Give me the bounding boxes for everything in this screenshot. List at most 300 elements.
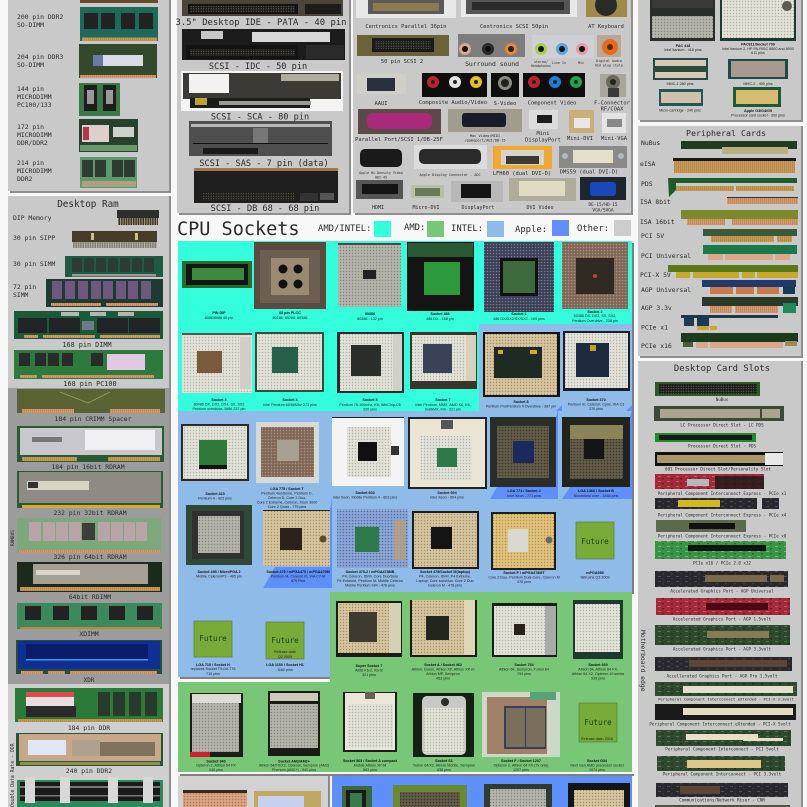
socket: Socket 370: Socket 370 bbox=[586, 398, 606, 402]
socket: Socket A: Athlon MP, Sempron bbox=[426, 672, 460, 676]
socket: Socket 603: Intel Xeon, Mobile Pentium 4 - 603 pins bbox=[333, 496, 397, 500]
connector: SCSI DB 68 bbox=[194, 168, 338, 214]
socket: Socket 7: 6x86MX, MII - 321 pin bbox=[425, 408, 461, 412]
socket: MMC-1 bbox=[653, 58, 708, 86]
connector: audio jacks: Line In bbox=[552, 61, 566, 65]
socket: PAC 611: PAC611/Socket 700 bbox=[741, 42, 775, 46]
socket: grey pin socket bbox=[484, 784, 552, 807]
connector: IDE PATA: 3.5" Desktop IDE - PATA - 40 pin bbox=[176, 18, 346, 28]
slot: 601 PDS: 601 Processor Direct Slot/Personality Slot bbox=[665, 466, 771, 472]
ram: 184 pin 16bit RDRAM: 184 pin 16bit RDRAM bbox=[51, 463, 125, 471]
socket: Socket A: 453 pins bbox=[436, 676, 450, 680]
future socket: LGA 715 bbox=[191, 621, 235, 676]
slot: AGP 1.5 bbox=[656, 598, 790, 622]
socket: 80386: 80386 bbox=[365, 312, 375, 316]
socket: 68 pin PLCC bbox=[254, 242, 326, 320]
card: PDS: PDS bbox=[641, 180, 653, 188]
connector: DVI Video: DVI Video bbox=[526, 205, 554, 211]
legend: AMD/INTEL: bbox=[318, 224, 371, 234]
socket: Socket 604: Socket 604 bbox=[437, 491, 458, 495]
ram: DIP memory: DIP Memory bbox=[13, 214, 52, 222]
ram: 184 pin DDR bbox=[15, 688, 163, 732]
socket: MMC-2 bbox=[728, 59, 788, 86]
socket: Socket F: 1207 pins bbox=[513, 768, 529, 772]
connector: Digital Audio RCA bbox=[595, 35, 623, 68]
future socket: LGA 1150 bbox=[266, 622, 304, 672]
future socket: mPGA989 bbox=[576, 522, 614, 580]
connector: Component Video: Component Video bbox=[528, 100, 576, 106]
slot: CNR: Communications/Network Riser - CNR bbox=[679, 798, 765, 802]
connector: Mac Video/MIDI DA-15 bbox=[448, 109, 522, 142]
socket: Socket 479 M: Laptop: Core solo/duo, Core 2 Duo bbox=[416, 579, 474, 583]
card: AGP 3.3v: AGP 3.3v bbox=[641, 304, 672, 312]
panel: AMD sockets bbox=[178, 592, 634, 776]
connector: SCSI IDC: SCSI - IDC - 50 pin bbox=[209, 62, 307, 72]
ram: DDR3 with heat spreader bbox=[17, 777, 163, 807]
connector: SCSI SAS bbox=[189, 121, 332, 169]
card: PCI Universal: PCI Universal bbox=[641, 252, 691, 260]
socket: Socket 939: 939 pins bbox=[591, 676, 605, 680]
connector: F-Connector: F-Connector bbox=[594, 100, 631, 106]
ram: 200 pin DDR2 SO-DIMM: 200 pin DDR2 bbox=[17, 13, 63, 21]
socket: Apple G3/G4/G5: Processor card socket - 300 pins bbox=[731, 114, 785, 118]
socket: MMC-2: MMC-2 - 400 pins bbox=[743, 82, 773, 86]
connector: Component Video bbox=[523, 73, 585, 106]
connector: Composite Audio/Video bbox=[419, 73, 487, 106]
socket: Socket S1 bbox=[413, 693, 475, 772]
card: ISA 16bit: ISA 16bit bbox=[640, 218, 675, 226]
socket: Socket 495: Mobile Celeron/P3 - 495 pin bbox=[196, 574, 242, 578]
legend: AMD: bbox=[404, 223, 425, 233]
socket: Socket 940: Socket 940 bbox=[206, 760, 226, 764]
socket: Socket 2: 80486 DX, DX2, SX, SX2, bbox=[574, 314, 616, 318]
ram: 184 pin CRIMM Spacer: 184 pin CRIMM Spacer bbox=[55, 415, 132, 423]
socket: Socket 1: 486 DX/DX2/SX/SX2 - 169 pins bbox=[493, 317, 545, 321]
ram: 30 pin SIPP: 30 pin SIPP bbox=[13, 234, 55, 242]
card: PCI-X 5V: PCI-X 5V bbox=[640, 271, 671, 279]
socket: Socket AM2 bbox=[259, 691, 329, 772]
card: AGP Universal bbox=[641, 280, 796, 294]
slot: PCIe x8: Peripheral Component Interconnect Express - PCIe x8 bbox=[658, 534, 787, 538]
ram: 326 pin 64bit RDRAM bbox=[17, 518, 161, 561]
connector: SCSI SAS: SCSI - SAS - 7 pin (data) bbox=[199, 159, 329, 169]
card: ISA 8bit bbox=[640, 197, 798, 206]
heading: Desktop Ram: Desktop Ram bbox=[57, 199, 119, 210]
ram: 204 pin DDR3 SO-DIMM bbox=[17, 44, 157, 78]
socket: Socket 5: Socket 5 bbox=[362, 398, 378, 402]
socket: Micro-cartridge: Micro-cartridge - 240 pins bbox=[659, 108, 701, 112]
connector: VGA: VGA/SVGA bbox=[592, 208, 614, 214]
future socket: mPGA989: Future bbox=[581, 537, 609, 546]
socket: PAC 611: 611 pins bbox=[751, 51, 765, 55]
ram: 72 pin SIMM: 72 pin bbox=[13, 283, 36, 291]
ram: 72 pin SIMM bbox=[13, 279, 163, 307]
connector: HDMI bbox=[356, 180, 403, 211]
slot: partial slot at bottom bbox=[655, 805, 790, 807]
connector: IDE PATA bbox=[176, 0, 346, 28]
socket: Socket 563: Socket 563 / Socket A compact bbox=[343, 759, 398, 763]
ram: 30 pin SIPP bbox=[13, 231, 157, 248]
socket: Socket 370: Pentium III, Celeron, Cyrix, VIA C3 bbox=[568, 402, 624, 406]
future socket: mPGA989: 989 pins Q3 2009 bbox=[580, 576, 610, 580]
socket: Socket 370 bbox=[563, 331, 630, 411]
socket: Socket 495 bbox=[186, 505, 252, 578]
connector: Mini-DVI bbox=[567, 110, 594, 142]
connector: audio jacks: Headphones bbox=[531, 64, 551, 68]
ram: 144 pin MICRODIMM bbox=[17, 83, 120, 116]
card: PDS bbox=[641, 178, 797, 197]
future socket: LGA 715: Future bbox=[199, 634, 227, 643]
future socket: mPGA989: mPGA989 bbox=[586, 571, 604, 575]
socket: Socket 563: Mobile Athlon XP-M bbox=[354, 764, 386, 768]
future socket: Socket G34 bbox=[570, 703, 624, 772]
socket: LGA 775: Pentium 4/extreme, Pentium D, bbox=[261, 492, 313, 496]
socket: Apple G3/G4/G5 bbox=[731, 87, 785, 118]
socket: LGA 775: LGA 775 / Socket T bbox=[270, 487, 304, 491]
ram: XDR: XDR bbox=[84, 677, 95, 684]
socket: Micro-cartridge bbox=[659, 89, 703, 112]
ram: 214 pin MICRODIMM bbox=[17, 157, 137, 188]
slot: PCIe x1: Peripheral Component Interconnect Express - PCIe x1 bbox=[658, 491, 787, 496]
socket: LGA 1366: LGA 1366 / Socket B bbox=[578, 489, 614, 493]
ram: 172 pin MICRODIMM: MICRODIMM bbox=[17, 131, 52, 139]
socket: Socket 603: Socket 603 bbox=[355, 491, 375, 495]
socket: Socket 3: Socket 3 bbox=[211, 398, 227, 402]
connector: Apple Hi-Density Video bbox=[357, 147, 405, 180]
socket: Socket 8 bbox=[483, 332, 560, 408]
future socket: LGA 1150: Q2 2009 bbox=[278, 655, 292, 659]
socket: Socket 2: Pentium Overdrive - 238 pin bbox=[572, 319, 618, 323]
connector: VGA bbox=[580, 177, 626, 214]
socket: Socket A: Athlon, Duron, Athlon XP, Athlon XP-m bbox=[412, 668, 474, 672]
connector: DisplayPort bbox=[451, 181, 503, 211]
connector: Digital Audio RCA: Digital Audio bbox=[596, 59, 622, 63]
socket: Socket 940 bbox=[190, 693, 243, 772]
socket: 80386: 80386 - 132 pin bbox=[357, 317, 383, 321]
ram: 144 pin MICRODIMM: 144 pin bbox=[17, 85, 44, 93]
connector: SCSI DB 68: SCSI - DB 68 - 68 pin bbox=[211, 204, 319, 214]
card: PCIe x1: PCIe x1 bbox=[641, 324, 668, 332]
future socket: Socket G34: Release date: 2010 bbox=[581, 737, 613, 741]
socket: Socket 479 bbox=[263, 498, 332, 588]
panel: desktop ram bbox=[8, 196, 171, 807]
accent: Apple corner Socket 8 bbox=[556, 405, 562, 411]
future socket: LGA 1150: LGA 1150 / Socket H1 bbox=[266, 663, 304, 667]
connector: F-Connector: RF/COAX bbox=[601, 106, 624, 112]
connector: 50 pin SCSI 2: 50 pin SCSI 2 bbox=[381, 59, 423, 65]
connector: Composite Audio/Video: Composite Audio/Video bbox=[419, 100, 487, 106]
panel: Apple sockets bbox=[332, 776, 632, 807]
slot: PCI 3.3: Peripheral Component Interconnect - PCI 3.3volt bbox=[663, 772, 782, 776]
future socket: Socket G34: Socket G34 bbox=[587, 759, 608, 763]
connector: Centronics SCSI 50pin bbox=[461, 0, 577, 30]
socket: Socket 479: Socket 479 / mPGA479 / mPGA479M bbox=[266, 570, 330, 574]
connector: SCSI IDC bbox=[182, 29, 345, 72]
heading: CPU Sockets: CPU Sockets bbox=[177, 219, 300, 240]
connector: VGA: DE-15/HD-15 bbox=[588, 202, 618, 208]
socket: Socket 478-2: P4 Extreme, Pentium M, Mobile Celeron bbox=[337, 579, 403, 583]
ram: 184 pin 16bit RDRAM bbox=[17, 426, 164, 471]
socket: Socket 754: 754 pins bbox=[517, 672, 531, 676]
ram: 232 pin 32bit RDRAM bbox=[17, 471, 163, 517]
socket: Socket 479 M: P4, Celeron, IDrM, P4 Extreme, bbox=[419, 574, 471, 578]
ram: 184 pin DDR: 184 pin DDR bbox=[68, 724, 110, 732]
ram: DIP memory bbox=[13, 210, 159, 225]
label: Double Data Rate vertical: Double Data Rate - DDR bbox=[10, 743, 16, 807]
slot: NuBus bbox=[655, 382, 760, 402]
future socket: Socket G34: 1974 pins bbox=[589, 768, 605, 772]
socket: LGA 775: Core 2 Quad - 775 pins bbox=[268, 505, 306, 509]
connector: F-Connector bbox=[594, 74, 631, 112]
socket: Socket S1: Socket S1 bbox=[435, 759, 453, 763]
socket: LGA 775: Core 2 Extreme, Celeron, Xeon 3000 bbox=[257, 500, 317, 504]
slot: PCI 3.3 bbox=[657, 756, 785, 776]
connector: Centronics Parallel 36pin: Centronics Parallel 36pin bbox=[365, 24, 447, 30]
connector: Mini DisplayPort: DisplayPort bbox=[525, 138, 561, 144]
ram: 30 pin SIMM: 30 pin SIMM bbox=[13, 260, 55, 268]
connector: Apple Hi-Density Video: HDI-45 bbox=[375, 176, 387, 180]
slot: AGP Universal: Accelerated Graphics Port - AGP Universal bbox=[670, 588, 774, 594]
socket: PAC 418: Intel Itanium - 418 pins bbox=[664, 48, 702, 52]
panel: hard drive connectors bbox=[176, 0, 351, 215]
ram: XDIMM bbox=[17, 603, 162, 638]
slot: PCI-X 5: Peripheral Component Interconnect eXtended - PCI-X 5volt bbox=[649, 722, 791, 726]
socket: Socket 8: Socket 8 bbox=[513, 400, 529, 404]
socket: PIN DIP bbox=[182, 261, 252, 320]
ram: 214 pin MICRODIMM: MICRODIMM bbox=[17, 167, 52, 175]
connector: AAUI bbox=[357, 74, 406, 107]
card: PCI Universal bbox=[641, 245, 797, 260]
socket: Apple G3/G4/G5: Apple G3/G4/G5 bbox=[744, 109, 772, 113]
socket: Socket 5 bbox=[337, 332, 404, 412]
connector: Mini-VGA: Mini-VGA bbox=[601, 136, 628, 142]
socket: Socket F: Opteron 2, Athlon 64 FX (7x only) bbox=[494, 764, 548, 768]
connector: Surround sound: Surround sound bbox=[465, 60, 519, 68]
panel: desktop card slots bbox=[638, 361, 803, 807]
section: DDR band bbox=[8, 684, 169, 807]
card: AGP Universal: AGP Universal bbox=[641, 286, 691, 294]
socket: Socket 5: 320 pins bbox=[363, 408, 377, 412]
connector: Micro-DVI bbox=[411, 185, 444, 211]
socket: LGA 775: Celeron D, Core 2 Duo, bbox=[268, 496, 306, 500]
socket: Socket 7: Socket 7 bbox=[435, 398, 451, 402]
ram: 168 pin PC100: 168 pin PC100 bbox=[63, 380, 117, 388]
slot: PDS bbox=[655, 433, 757, 448]
connector: Centronics Parallel 36pin bbox=[356, 0, 456, 30]
socket: Socket A bbox=[410, 600, 477, 680]
socket: LGA 775 bbox=[256, 422, 319, 509]
socket: gold frame socket bbox=[254, 791, 321, 807]
card: eISA bbox=[640, 158, 796, 173]
socket: Socket 939: Athlon 64, Athlon 64 FX, bbox=[578, 668, 618, 672]
card: ISA 16bit bbox=[640, 210, 798, 226]
socket: PAC 611: Intel Itanium 2, HP PA-RISC 8800 and 8900 bbox=[722, 47, 794, 51]
socket: Socket 479 M: Celeron M - 478 pins bbox=[428, 584, 462, 588]
slot: NuBus: NuBus bbox=[716, 397, 729, 402]
ram: 144 pin MICRODIMM: MICRODIMM bbox=[17, 93, 52, 101]
socket: Super Socket 7: AMD K6-2, K6-III bbox=[355, 668, 383, 672]
legend: INTEL: bbox=[451, 224, 483, 234]
ram: 64bit RDIMM bbox=[17, 562, 162, 601]
socket: Socket 478-2: P4, Celeron, IDrM, Core Duo/Solo bbox=[342, 574, 398, 578]
connector: DVI Video bbox=[509, 178, 576, 211]
slot: PCIe x4 bbox=[655, 498, 787, 518]
slot: AGP Pro: Accellerated Graphics Port - AGP Pro 1.5volt bbox=[667, 674, 778, 678]
connector: AAUI: AAUI bbox=[375, 101, 387, 107]
connector: Digital Audio RCA: RCA plug style bbox=[595, 64, 623, 68]
socket: Socket 4: Socket 4 bbox=[282, 398, 299, 402]
heading: Desktop Card Slots: Desktop Card Slots bbox=[674, 364, 770, 374]
slot: 601 PDS bbox=[655, 452, 783, 472]
panel: peripheral cards bbox=[638, 126, 803, 358]
slot: PCI 5 bbox=[656, 730, 791, 752]
slot: PDS: Processor Direct Slot - PDS bbox=[688, 444, 757, 448]
socket: Socket AM2: Athlon 64/FX/X2, Opteron, Sempron (AM2) bbox=[259, 764, 329, 768]
connector: DMS59 bbox=[559, 146, 627, 176]
socket: Socket 7: Intel Pentium, MMX, AMD K6, K6, bbox=[415, 403, 471, 407]
socket: Socket 2 bbox=[562, 242, 628, 323]
future socket: LGA 1150: Future bbox=[271, 636, 299, 645]
slot: AGP 3.3 bbox=[655, 625, 790, 652]
ram: 214 pin MICRODIMM: DDR2 bbox=[17, 175, 33, 183]
card: NuBus: NuBus bbox=[641, 139, 660, 147]
socket: beige pin socket bbox=[568, 783, 630, 807]
slot: PCIe x8 bbox=[656, 520, 787, 538]
connector: DMS59: DMS59 (dual DVI-D) bbox=[560, 170, 618, 176]
card: eISA: eISA bbox=[640, 160, 656, 168]
socket: Socket 4 bbox=[255, 332, 324, 407]
slot: PCIe x4: Peripheral Component Interconnect Express - PCIe x4 bbox=[658, 512, 787, 518]
connector: 50 pin SCSI 2 bbox=[357, 35, 449, 65]
ram: 200 pin DDR2 SO-DIMM bbox=[17, 7, 158, 41]
card: PCI-X 5V bbox=[640, 265, 798, 279]
slot: AGP 3.3: Accelerated Graphics Port - AGP 3.3volt bbox=[673, 646, 772, 652]
socket: Socket 3: Pentium overdrive, 5x86 237 pin bbox=[193, 407, 245, 411]
slot: PCIe x16: PCIe x16 / PCIe 2.0 x32 bbox=[693, 560, 751, 566]
ram: 184 pin CRIMM Spacer bbox=[17, 389, 165, 423]
socket: Socket 4: Intel Pentium 60/66Mhz 273 pins bbox=[263, 403, 317, 407]
ram: 144 pin MICRODIMM: PC100/133 bbox=[17, 101, 52, 109]
slot: PCI-X 3.3 bbox=[655, 682, 797, 702]
slot: LC PDS bbox=[654, 406, 784, 428]
connector: LFH60: LFH60 (dual DVI-D) bbox=[493, 171, 551, 177]
ram: 232 pin 32bit RDRAM: 232 pin 32bit RDRAM bbox=[53, 509, 127, 517]
socket: Socket 495: Socket 495 / MicroPGA 2 bbox=[197, 570, 241, 574]
connector: Mini DisplayPort bbox=[525, 110, 561, 144]
socket: Super Socket 7: Super Socket 7 bbox=[356, 664, 382, 668]
socket: Socket 604: Intel Xeon - 604 pins bbox=[430, 496, 464, 500]
connector: Mini DisplayPort: Mini bbox=[537, 131, 549, 137]
socket: Socket 939: Socket 939 bbox=[588, 663, 608, 667]
slot: AGP Pro bbox=[655, 657, 792, 678]
ram: 172 pin MICRODIMM bbox=[17, 119, 138, 152]
connector: Mac Video/MIDI DA-15: /gameport/AUI/DB-15 bbox=[464, 138, 506, 142]
connector: SCSI SCA bbox=[181, 71, 343, 122]
socket: PIN DIP: 8086/8088 40-pin bbox=[205, 316, 233, 320]
ram: 64bit RDIMM: 64bit RDIMM bbox=[69, 593, 111, 601]
socket: Socket 3: 80486 DX, DX2, DX4, SX, SX2 bbox=[194, 402, 244, 406]
connector: S-Video: S-Video bbox=[494, 101, 516, 107]
socket: Socket 939 bbox=[572, 600, 624, 680]
socket: Socket 940: Opteron 2, Athlon 64 FX bbox=[196, 764, 236, 768]
slot: AGP Universal bbox=[655, 571, 788, 594]
socket: Socket 939: Athlon 64 X2, Opteron 10 series bbox=[572, 672, 624, 676]
socket: Socket 5: Pentium 75-100mhz, K5, WinChip-C6 bbox=[339, 403, 401, 407]
ram: 30 pin SIMM bbox=[13, 256, 163, 277]
future socket: Socket G34: Future bbox=[584, 718, 612, 727]
socket: LGA 771: Intel Xeon - 771 pins bbox=[507, 494, 541, 498]
socket: Socket 604 bbox=[408, 417, 487, 500]
connector: Apple Display Connector: Apple Display Connector - ADC bbox=[419, 173, 481, 177]
card: PCIe x16 bbox=[641, 333, 798, 350]
ram: 72 pin SIMM: SIMM bbox=[13, 291, 29, 299]
future socket: Socket G34: Next Gen AMD processor socket bbox=[570, 764, 624, 768]
socket: PAC 418: PAC 418 bbox=[676, 44, 690, 48]
slot: LC PDS: LC Processor Direct Slot - LC PDS bbox=[680, 422, 764, 428]
label: RAMBUS vertical: RAMBUS bbox=[10, 530, 16, 546]
ram: XDIMM: XDIMM bbox=[79, 630, 99, 638]
ram: 172 pin MICRODIMM: DDR/DDR2 bbox=[17, 139, 48, 147]
future socket: LGA 1150: Release date bbox=[274, 650, 296, 654]
connector: AT Keyboard: AT Keyboard bbox=[588, 24, 624, 30]
socket: Socket 479: Pentium M, Celeron M, VIA C7-M bbox=[271, 574, 325, 578]
panel: external connectors bbox=[353, 0, 633, 215]
connector: Mini-VGA bbox=[601, 113, 628, 142]
connector: AT Keyboard bbox=[586, 0, 627, 30]
socket: 486: Socket 486 bbox=[430, 312, 450, 316]
connector: Mac Video/MIDI DA-15: Mac Video/MIDI bbox=[470, 134, 500, 138]
socket: PAC 611 bbox=[720, 0, 796, 55]
future socket: LGA 1150: 1160 pins bbox=[277, 668, 293, 672]
socket: Socket S1: Turion 64/X2, Athlon Mobile, Sempron bbox=[413, 764, 475, 768]
future socket: LGA 715: replaces Socket T/LGA 775 bbox=[191, 667, 235, 671]
connector: HDMI: HDMI bbox=[372, 205, 384, 211]
socket: 486 bbox=[407, 242, 474, 321]
ram: 168 pin DIMM: 168 pin DIMM bbox=[62, 341, 112, 349]
future socket: LGA 715: 715 pins bbox=[206, 672, 220, 676]
card: PCIe x1 bbox=[641, 315, 778, 332]
socket: Socket 1 bbox=[484, 242, 554, 321]
card: PCI 5V: PCI 5V bbox=[641, 232, 664, 240]
connector: Mini-DVI: Mini-DVI bbox=[567, 136, 593, 142]
connector: Centronics SCSI 50pin: Centronics SCSI 50pin bbox=[480, 24, 548, 30]
socket: PIN DIP: PIN DIP bbox=[212, 311, 226, 315]
socket: copper pin array bbox=[183, 790, 247, 807]
socket: Socket 478-2: Socket 478-2 / mPGA478MB bbox=[346, 570, 395, 574]
socket: LGA 771: LGA 771 / Socket J bbox=[507, 489, 541, 493]
socket: Socket AM2: Socket AM2/AM2+ bbox=[278, 760, 310, 764]
socket: Socket 479 M: Socket 478/Socket M(laptop) bbox=[420, 570, 471, 574]
socket: PAC 418 bbox=[650, 0, 715, 52]
card: PCI 5V bbox=[641, 229, 797, 242]
legend: Other: bbox=[577, 224, 609, 234]
accent: Apple corner Socket 370 bbox=[626, 405, 632, 411]
socket: Socket A: Socket A / Socket 462 bbox=[424, 663, 462, 667]
connector: audio jacks bbox=[531, 35, 594, 68]
socket: Socket 2: Socket 2 bbox=[587, 310, 603, 314]
connector: Apple Hi-Density Video: Apple Hi-Density Video bbox=[359, 171, 403, 175]
card: AGP 3.3v bbox=[641, 297, 798, 313]
socket: Socket AM2: Phenom (AM2+) - 940 pins bbox=[272, 768, 316, 772]
socket: Socket 603 bbox=[332, 417, 404, 500]
socket: 486: 486 DX - 168 pin bbox=[426, 317, 454, 321]
slot: CNR bbox=[656, 783, 788, 802]
ram: 204 pin DDR3 SO-DIMM: 204 pin DDR3 bbox=[17, 53, 63, 61]
legend: Apple: bbox=[515, 225, 547, 235]
socket: Socket F: Socket F / Socket 1207 bbox=[501, 759, 541, 763]
panel: AMD/INTEL sockets bbox=[178, 241, 634, 413]
ram: 172 pin MICRODIMM: 172 pin bbox=[17, 123, 44, 131]
